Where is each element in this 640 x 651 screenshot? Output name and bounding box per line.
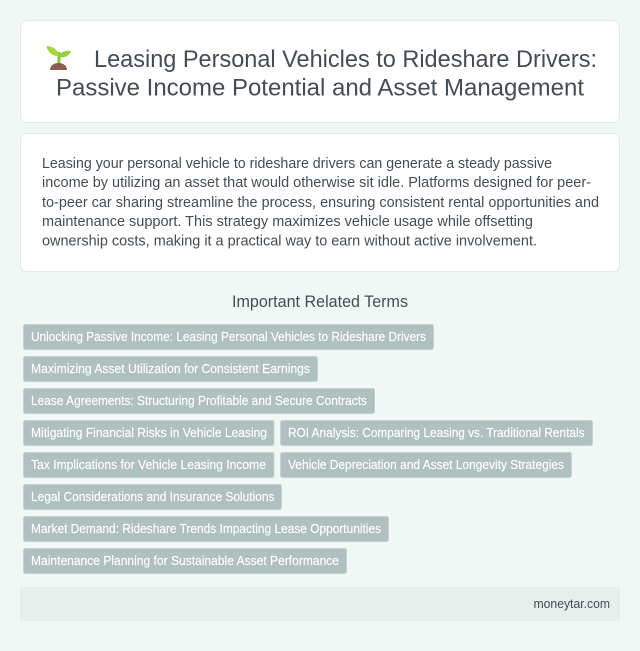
text block: description (42, 155, 599, 250)
tag (24, 516, 388, 542)
text block: description: to-peer car sharing streamline the process, ensuring consistent rental opportunities and (42, 194, 599, 211)
tag: Maintenance Planning for Sustainable Asset Performance (31, 554, 339, 568)
tag (280, 420, 592, 446)
tag list (24, 324, 592, 574)
tag: Market Demand: Rideshare Trends Impacting Lease Opportunities (31, 522, 381, 536)
title: Leasing Personal Vehicles to Rideshare Drivers: (94, 46, 597, 73)
tag (24, 452, 274, 478)
tag (24, 420, 274, 446)
tag: Mitigating Financial Risks in Vehicle Leasing (31, 426, 267, 440)
tag: Vehicle Depreciation and Asset Longevity Strategies (288, 458, 564, 472)
tag: Maximizing Asset Utilization for Consistent Earnings (31, 362, 310, 376)
panel: title card (20, 20, 620, 122)
tag (24, 484, 282, 510)
tag: ROI Analysis: Comparing Leasing vs. Traditional Rentals (288, 426, 584, 440)
tag (280, 452, 572, 478)
title (56, 46, 597, 102)
tag (24, 548, 346, 574)
heading: related terms: Important Related Terms (232, 293, 408, 311)
tag: Lease Agreements: Structuring Profitable and Secure Contracts (31, 394, 367, 408)
icon: seedling (46, 46, 71, 70)
tag: Legal Considerations and Insurance Solutions (31, 490, 274, 504)
tag: Unlocking Passive Income: Leasing Personal Vehicles to Rideshare Drivers (31, 330, 426, 344)
text block: description: maintenance support. This strategy maximizes vehicle usage while offsetting (42, 213, 533, 230)
tag (24, 388, 374, 414)
text block: description: Leasing your personal vehicle to rideshare drivers can generate a steady passive (42, 155, 552, 172)
tag: Tax Implications for Vehicle Leasing Income (31, 458, 266, 472)
tag (24, 356, 318, 382)
panel: description (20, 134, 620, 272)
footer: moneytar.com (534, 597, 610, 611)
text block: description: ownership costs, making it a practical way to earn without active involvement. (42, 232, 537, 250)
tag (24, 324, 434, 350)
text block: description: income by utilizing an asset that would otherwise sit idle. Platforms designed for peer- (42, 174, 591, 191)
footer (20, 587, 620, 621)
title: Passive Income Potential and Asset Management (56, 74, 584, 102)
